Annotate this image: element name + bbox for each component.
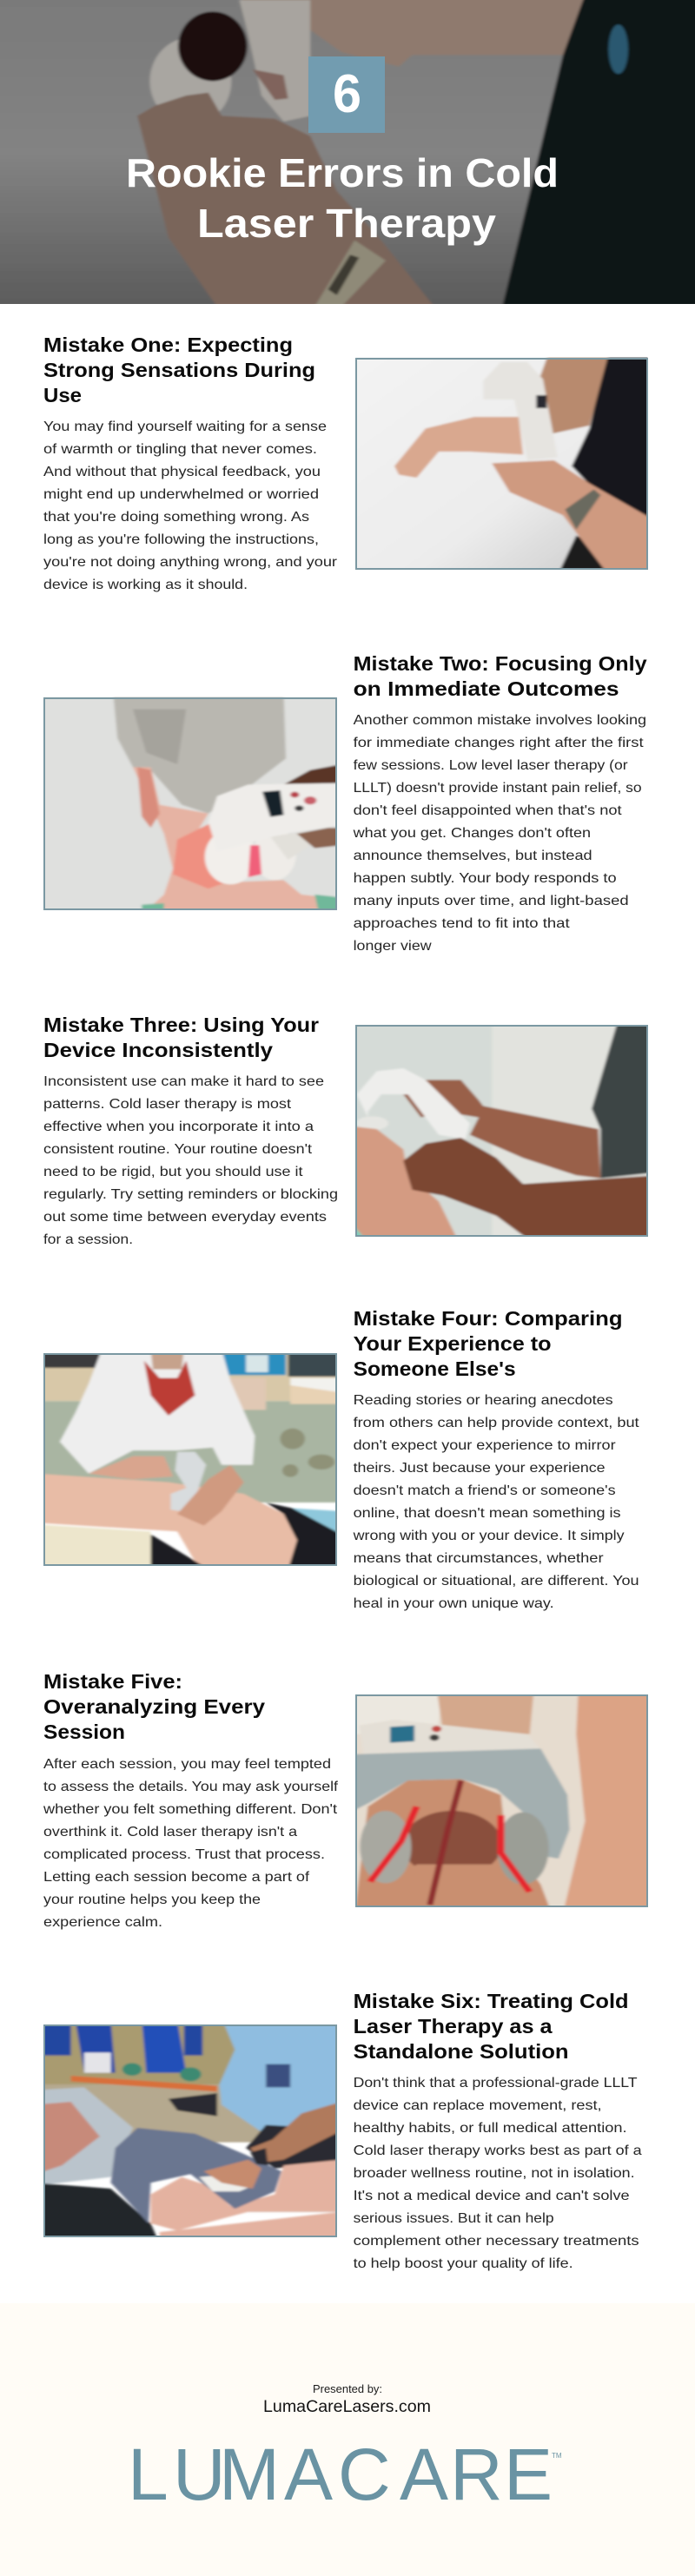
heading xyxy=(43,1670,265,1743)
body text: means that circumstances, whether xyxy=(354,1551,604,1566)
heading: Mistake One: Expecting xyxy=(43,334,293,356)
body text xyxy=(43,1757,339,1930)
body text: You may find yourself waiting for a sense xyxy=(43,419,327,434)
body text: to assess the details. You may ask yourself xyxy=(43,1780,339,1794)
photo: treating athlete's thigh xyxy=(43,2024,337,2237)
body text: doesn't match a friend's or someone's xyxy=(354,1483,616,1498)
body text: LLLT) doesn't provide instant pain relief, so xyxy=(354,781,642,796)
body text: from others can help provide context, but xyxy=(354,1416,639,1430)
logo wordmark: LUMACARE xyxy=(128,2434,553,2515)
heading: Use xyxy=(43,384,82,406)
title xyxy=(126,150,559,246)
body text: online, that doesn't mean something is xyxy=(354,1506,621,1521)
heading: Mistake Two: Focusing Only xyxy=(354,652,647,675)
heading: Overanalyzing Every xyxy=(43,1695,265,1718)
heading: Mistake Six: Treating Cold xyxy=(354,1990,629,2012)
panel: mistake one xyxy=(43,334,656,592)
body text xyxy=(352,1393,639,1611)
footer xyxy=(0,2303,695,2576)
body text: Don't think that a professional-grade LLLT xyxy=(354,2076,638,2091)
body text: consistent routine. Your routine doesn't xyxy=(43,1142,313,1157)
body text: Another common mistake involves looking xyxy=(354,713,646,728)
body text: Inconsistent use can make it hard to see xyxy=(43,1074,324,1089)
heading: Session xyxy=(43,1721,125,1743)
heading: Mistake Three: Using Your xyxy=(43,1014,319,1036)
hero photo: hands holding device xyxy=(0,0,695,313)
body text: many inputs over time, and light-based xyxy=(354,894,629,908)
panel: mistake two xyxy=(36,652,647,954)
body text: don't feel disappointed when that's not xyxy=(354,803,622,818)
header banner xyxy=(0,0,695,313)
body text: device is working as it should. xyxy=(43,578,248,592)
body text: for immediate changes right after the first xyxy=(354,736,644,750)
body text: effective when you incorporate it into a xyxy=(43,1120,314,1134)
body text: longer view xyxy=(354,939,432,954)
body text: Letting each session become a part of xyxy=(43,1870,310,1885)
heading: Mistake Four: Comparing xyxy=(354,1307,623,1330)
heading: Strong Sensations During xyxy=(43,359,315,381)
title: Laser Therapy xyxy=(197,201,496,246)
body text: happen subtly. Your body responds to xyxy=(354,871,617,886)
number badge xyxy=(308,56,385,133)
body text: out some time between everyday events xyxy=(43,1210,327,1225)
body text xyxy=(354,2076,642,2271)
panel: mistake three xyxy=(43,1014,656,1247)
heading xyxy=(43,1014,319,1061)
body text: of warmth or tingling that never comes. xyxy=(43,442,317,457)
heading: Someone Else's xyxy=(354,1357,516,1380)
body text: approaches tend to fit into that xyxy=(354,916,570,931)
body text: few sessions. Low level laser therapy (or xyxy=(354,758,628,773)
body text xyxy=(43,1074,338,1247)
body text xyxy=(352,713,646,954)
body text xyxy=(43,419,338,592)
body text: serious issues. But it can help xyxy=(354,2211,554,2226)
body text: announce themselves, but instead xyxy=(354,849,592,863)
body text: regularly. Try setting reminders or blocking xyxy=(43,1187,338,1202)
heading xyxy=(43,334,315,406)
body text: It's not a medical device and can't solve xyxy=(354,2189,630,2203)
body text: Reading stories or hearing anecdotes xyxy=(354,1393,613,1408)
photo: device on knee with red light xyxy=(355,1694,648,1907)
website: LumaCareLasers.com xyxy=(263,2398,431,2416)
heading: Device Inconsistently xyxy=(43,1039,273,1061)
body text: healthy habits, or full medical attention. xyxy=(354,2121,627,2136)
panel: mistake six xyxy=(36,1990,642,2271)
body text: to help boost your quality of life. xyxy=(354,2256,573,2271)
body text: Cold laser therapy works best as part of a xyxy=(354,2143,642,2158)
body text: After each session, you may feel tempted xyxy=(43,1757,331,1772)
photo: device on neck xyxy=(36,692,346,915)
body text: overthink it. Cold laser therapy isn't a xyxy=(43,1825,297,1840)
heading: on Immediate Outcomes xyxy=(354,677,619,700)
body text: your routine helps you keep the xyxy=(43,1892,261,1907)
logo wordmark: TM xyxy=(552,2452,562,2460)
body text: biological or situational, are different. You xyxy=(354,1574,639,1589)
body text: theirs. Just because your experience xyxy=(354,1461,606,1476)
body text: patterns. Cold laser therapy is most xyxy=(43,1097,292,1112)
photo: device over wrist xyxy=(355,358,648,570)
body text: don't expect your experience to mirror xyxy=(354,1438,616,1453)
heading: Your Experience to xyxy=(354,1332,552,1355)
body text: long as you're following the instructions, xyxy=(43,532,319,547)
body text: you're not doing anything wrong, and your xyxy=(43,555,338,570)
photo: doctor treating knee xyxy=(36,1349,346,1569)
heading xyxy=(354,1990,629,2063)
body text: might end up underwhelmed or worried xyxy=(43,487,319,502)
photo: device on shoulder xyxy=(355,1025,648,1237)
body text: And without that physical feedback, you xyxy=(43,465,321,479)
body text: for a session. xyxy=(43,1232,133,1247)
body text: whether you felt something different. Don't xyxy=(43,1802,338,1817)
heading: Laser Therapy as a xyxy=(354,2015,553,2038)
body text: complicated process. Trust that process. xyxy=(43,1847,325,1862)
body text: need to be rigid, but you should use it xyxy=(43,1165,303,1179)
body text: device can replace movement, rest, xyxy=(354,2098,602,2113)
panel: mistake five xyxy=(43,1670,656,1930)
body text: experience calm. xyxy=(43,1915,162,1930)
body text: what you get. Changes don't often xyxy=(352,826,591,841)
number badge: 6 xyxy=(333,64,361,124)
body text: heal in your own unique way. xyxy=(354,1596,554,1611)
heading xyxy=(354,1307,623,1380)
body text: that you're doing something wrong. As xyxy=(43,510,309,525)
body text: wrong with you or your device. It simply xyxy=(352,1529,625,1543)
body text: broader wellness routine, not in isolation. xyxy=(354,2166,635,2181)
presented by line: Presented by: xyxy=(313,2383,382,2395)
panel: mistake four xyxy=(36,1307,639,1611)
heading: Standalone Solution xyxy=(354,2040,569,2063)
heading xyxy=(354,652,647,700)
heading: Mistake Five: xyxy=(43,1670,182,1693)
body text: complement other necessary treatments xyxy=(354,2234,639,2249)
title: Rookie Errors in Cold xyxy=(126,150,559,195)
